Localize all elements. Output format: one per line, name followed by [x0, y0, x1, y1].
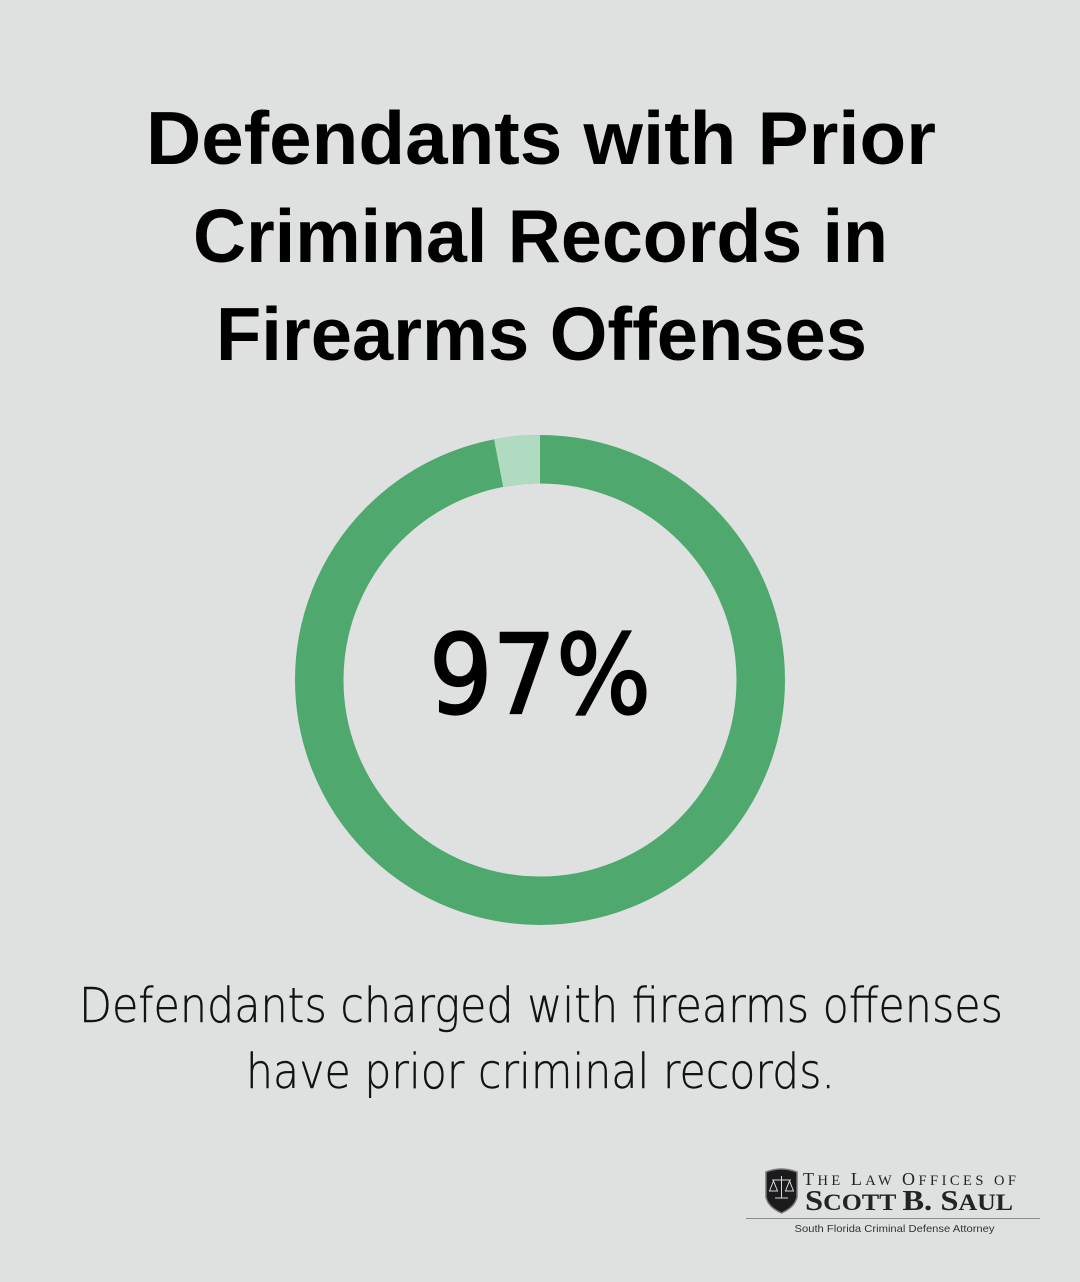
title	[146, 96, 936, 376]
logo: The Law Offices of Scott B. Saul	[746, 1169, 1040, 1235]
title: Criminal Records in	[193, 194, 888, 278]
icon: shield with scales	[766, 1169, 797, 1213]
donut chart: 97%	[319, 459, 761, 901]
logo tagline: South Florida Criminal Defense Attorney	[794, 1223, 995, 1235]
logo name: SCOTT B. S AUL	[805, 1185, 1013, 1217]
title: Defendants with Prior	[146, 96, 936, 180]
percentage value: 97%	[429, 611, 651, 739]
title: Firearms Offenses	[216, 292, 867, 376]
description text: have prior criminal records.	[246, 1044, 835, 1100]
logo name	[803, 1169, 1016, 1217]
description text	[79, 978, 1003, 1100]
logo name: THE LAW OFFICES OF	[803, 1169, 1016, 1189]
